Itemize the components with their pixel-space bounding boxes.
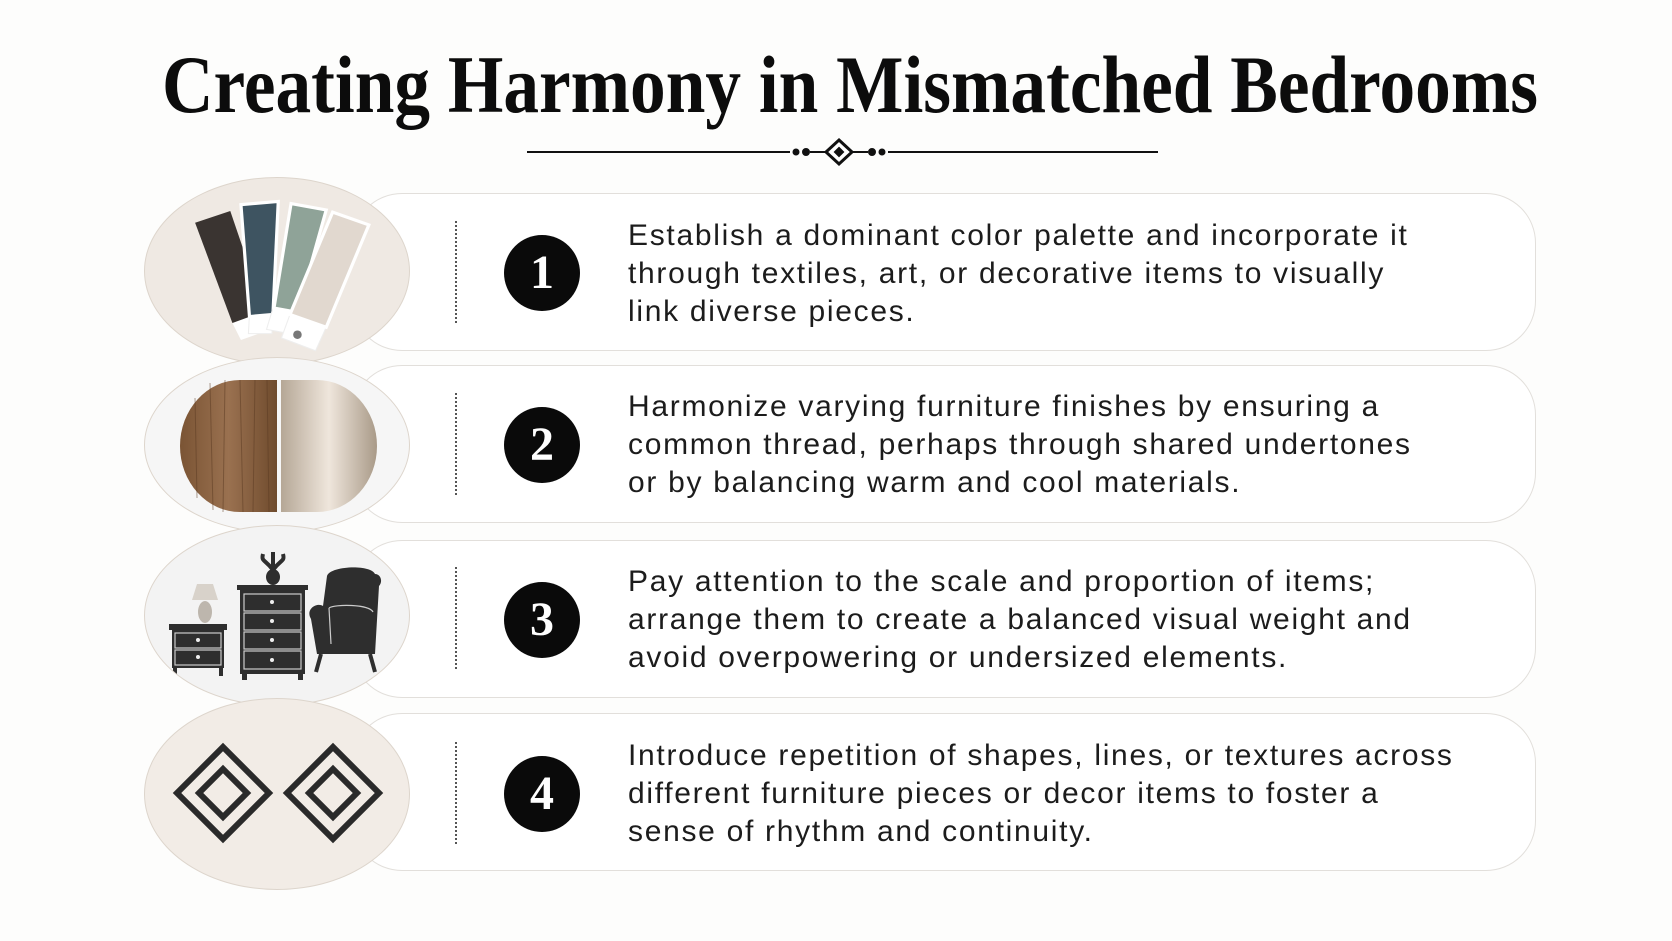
text 3 [628, 565, 1412, 674]
icon: color swatches [144, 177, 410, 365]
text 2: or by balancing warm and cool materials. [628, 466, 1241, 499]
number 2 [504, 407, 580, 483]
text 3: Pay attention to the scale and proportion of items; [628, 565, 1375, 598]
card 4 [352, 713, 1536, 871]
number 3 [504, 582, 580, 658]
text 4: Introduce repetition of shapes, lines, or textures across [628, 739, 1454, 772]
dotted separators [455, 221, 457, 323]
number 3: 3 [530, 593, 554, 646]
text 4: different furniture pieces or decor items to foster a [628, 777, 1380, 810]
text 1: link diverse pieces. [628, 295, 915, 328]
text 2: common thread, perhaps through shared undertones [628, 428, 1412, 461]
text 2 [628, 390, 1412, 499]
icon: repeating diamonds [144, 698, 410, 890]
number 1 [504, 235, 580, 311]
text 3: avoid overpowering or undersized elements. [628, 641, 1288, 674]
text 4 [628, 739, 1454, 848]
card 1 [352, 193, 1536, 351]
title [162, 39, 1538, 166]
text 4: sense of rhythm and continuity. [628, 815, 1094, 848]
text 1 [628, 219, 1409, 328]
number 1: 1 [530, 246, 554, 299]
text 1: through textiles, art, or decorative items to visually [628, 257, 1385, 290]
text 2: Harmonize varying furniture finishes by ensuring a [628, 390, 1380, 423]
number 4 [504, 756, 580, 832]
card 3 [352, 540, 1536, 698]
icon: wood and metal finishes [144, 357, 410, 533]
icon: furniture silhouettes [144, 525, 410, 706]
number 4: 4 [530, 767, 554, 820]
number 2: 2 [530, 418, 554, 471]
text 3: arrange them to create a balanced visual weight and [628, 603, 1412, 636]
text 1: Establish a dominant color palette and incorporate it [628, 219, 1409, 252]
card 2 [352, 365, 1536, 523]
